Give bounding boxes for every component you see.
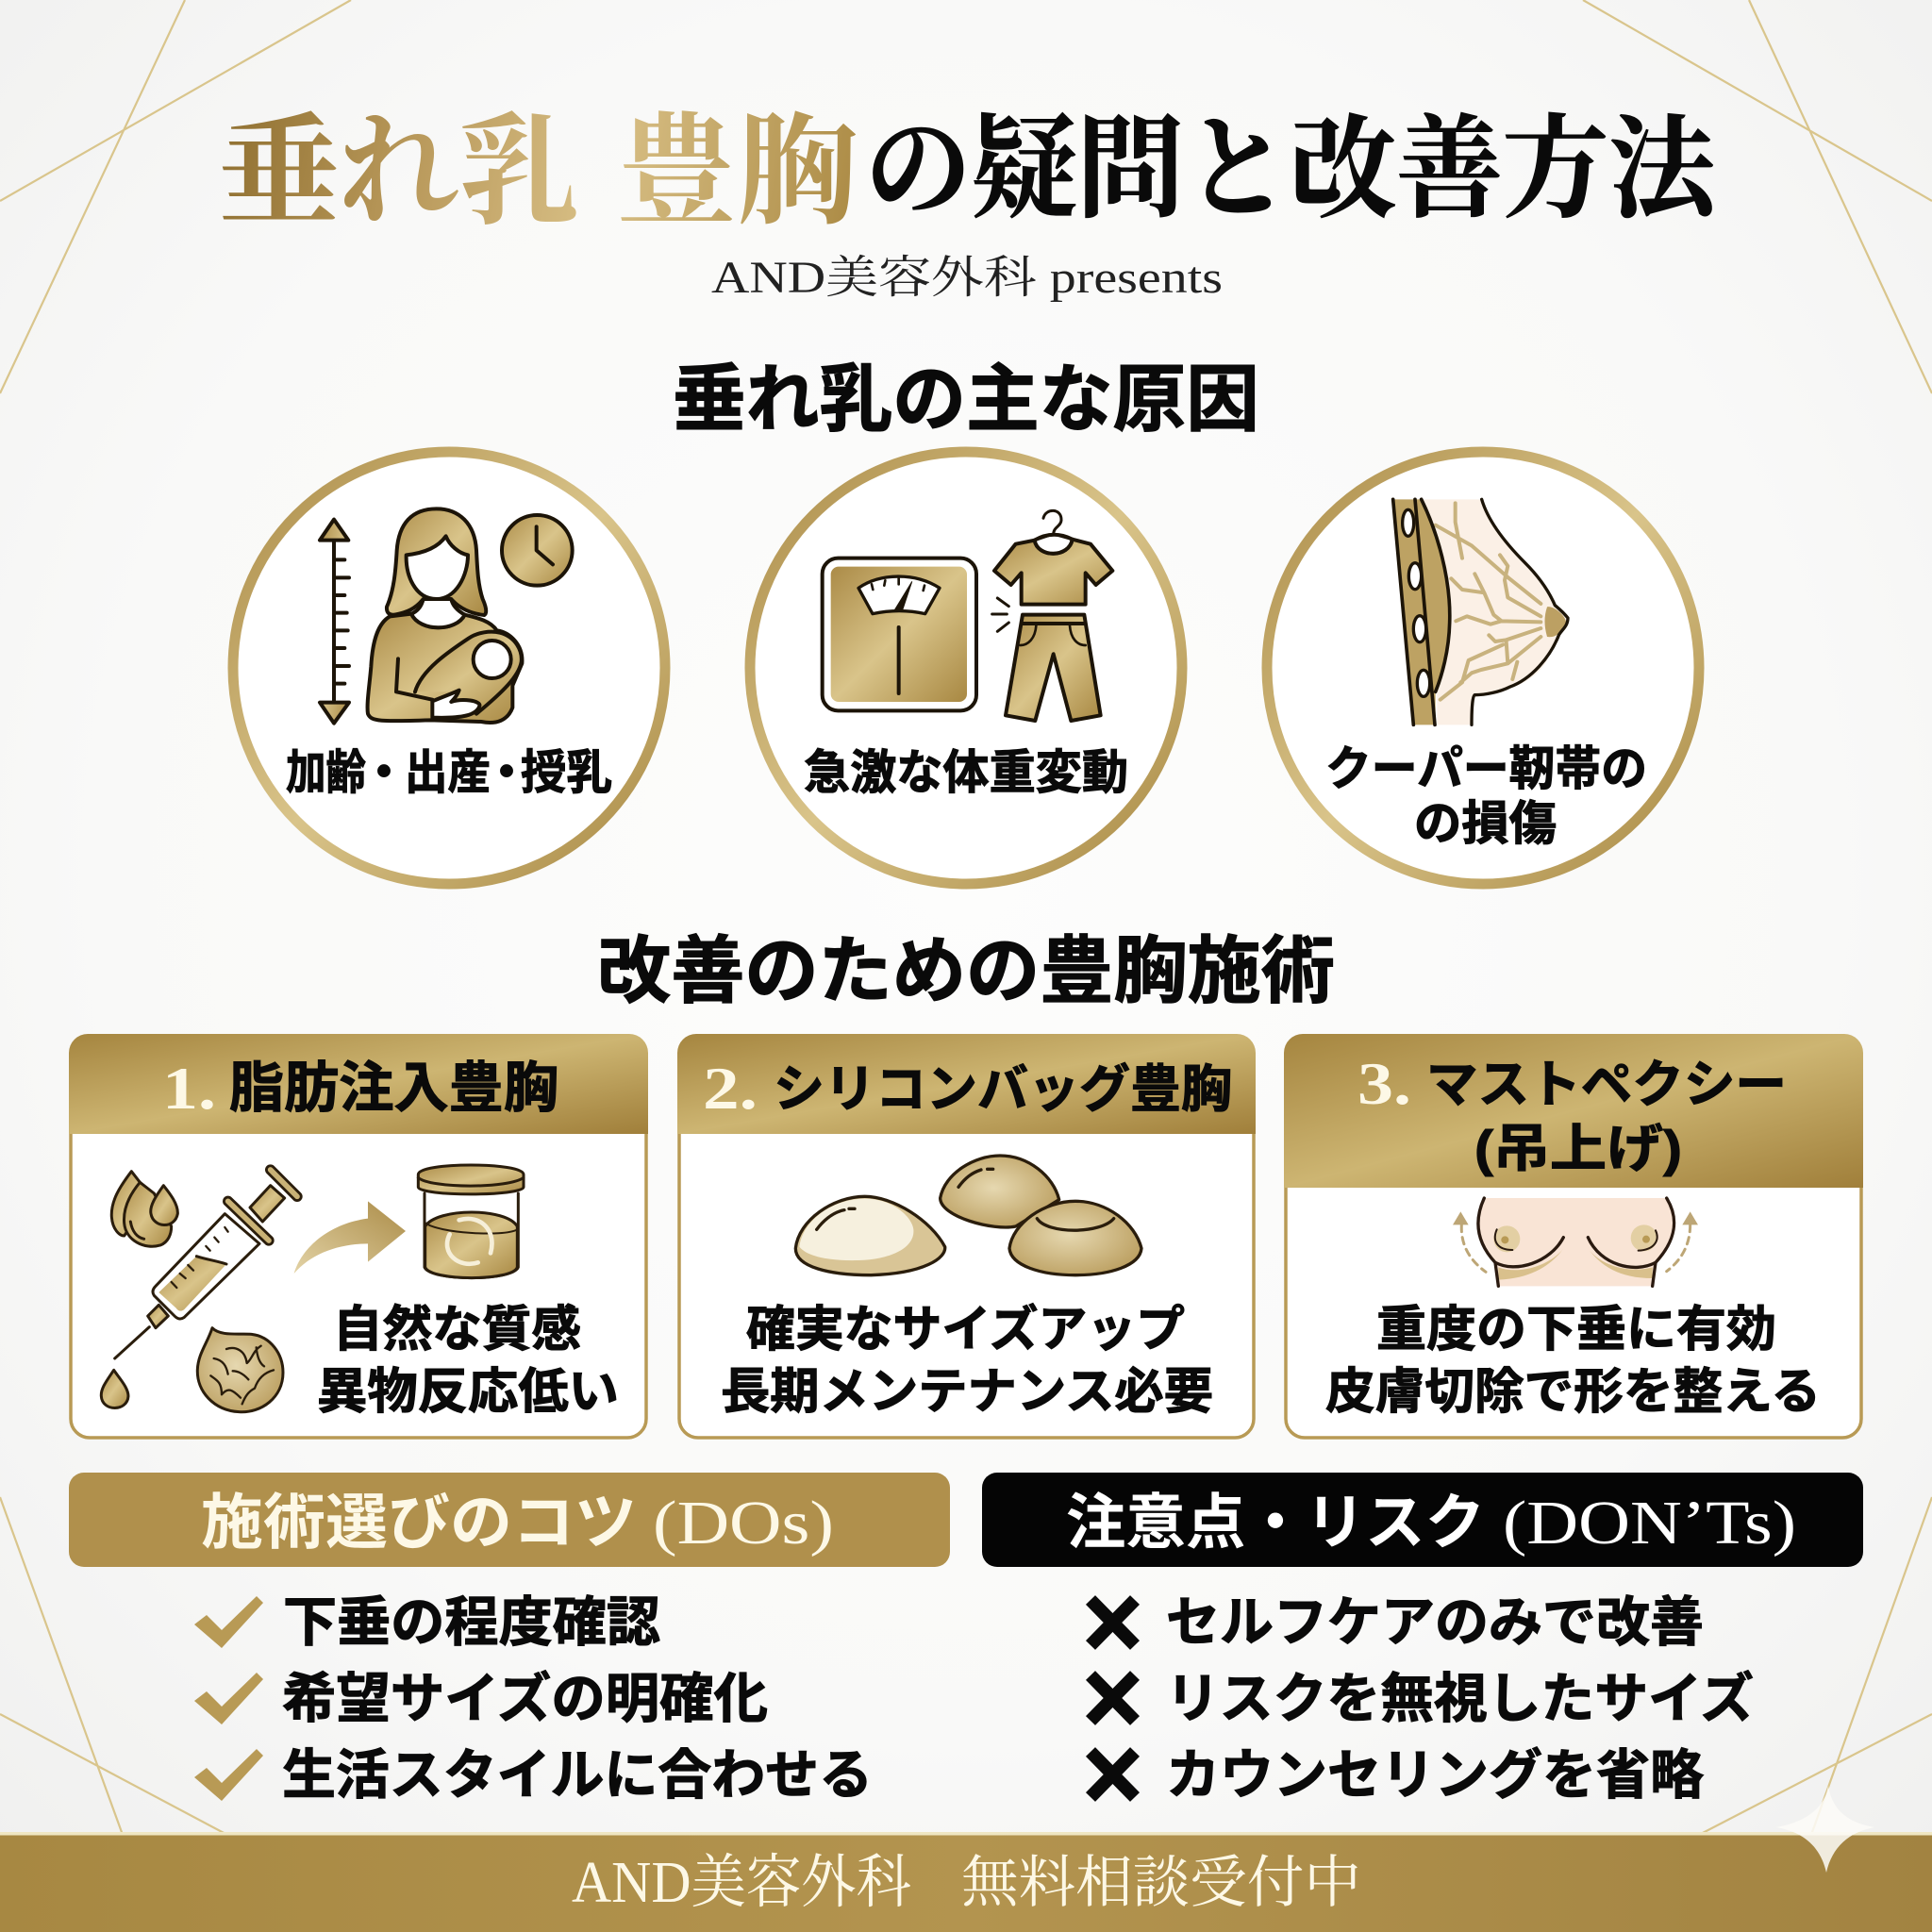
panel: DON'Ts <box>982 1473 1863 1806</box>
description: 皮膚切除で形を整える <box>1325 1365 1821 1420</box>
label: 加齢 <box>286 746 366 799</box>
label: の損傷 <box>1414 797 1557 850</box>
footer bar: AND美容外科 <box>572 1851 911 1915</box>
DOs header bar: (DOs) <box>653 1489 834 1557</box>
DON'Ts item 3: カウンセリングを省略 <box>1166 1745 1704 1806</box>
icon: sparkle <box>1776 1786 1874 1873</box>
panel: cause 3 Cooper ligament damage <box>1267 452 1699 884</box>
description: 自然な質感 <box>333 1303 581 1357</box>
description <box>1325 1303 1821 1420</box>
label: ・ <box>360 746 408 799</box>
title: 豊胸 <box>616 106 858 240</box>
heading: causes: 垂れ乳の主な原因 <box>673 358 1259 441</box>
label <box>286 746 612 799</box>
description: 長期メンテナンス必要 <box>721 1365 1213 1420</box>
DON'Ts header bar <box>982 1473 1863 1567</box>
header: (吊上げ) <box>1474 1121 1682 1177</box>
header: 1. <box>162 1055 216 1122</box>
DOs item 3: 生活スタイルに合わせる <box>282 1745 873 1806</box>
icon: scale and clothes <box>823 510 1112 721</box>
panel: cause 2 weight change <box>750 452 1182 884</box>
description <box>317 1303 619 1420</box>
DOs header bar: 施術選びのコツ <box>201 1489 637 1557</box>
description: 重度の下垂に有効 <box>1376 1303 1776 1357</box>
header <box>677 1034 1256 1134</box>
header <box>1284 1034 1863 1188</box>
title <box>219 106 1724 240</box>
footer bar: 無料相談受付中 <box>961 1852 1361 1914</box>
panel: cause 1 aging, childbirth, nursing <box>233 452 665 884</box>
description <box>721 1303 1213 1420</box>
title: の疑問と改善方法 <box>865 108 1724 232</box>
DON'Ts header bar: (DON’Ts) <box>1503 1489 1796 1557</box>
title: 垂れ乳 <box>219 106 579 240</box>
panel: treatment 1 fat injection <box>69 1034 648 1438</box>
panel: treatment 2 silicone implant <box>677 1034 1256 1438</box>
label <box>1325 742 1647 850</box>
header: シリコンバッグ豊胸 <box>774 1061 1232 1118</box>
label: ・ <box>483 746 530 799</box>
DOs item 2: 希望サイズの明確化 <box>282 1669 768 1729</box>
description: 確実なサイズアップ <box>746 1303 1185 1357</box>
label: 授乳 <box>521 746 612 799</box>
icon: torso with lift arrows <box>1453 1198 1698 1286</box>
icon: silicone implants <box>795 1156 1141 1275</box>
label: 急激な体重変動 <box>804 746 1128 799</box>
DON'Ts item 2: リスクを無視したサイズ <box>1166 1669 1754 1729</box>
icon: mother, baby, ruler and clock <box>320 508 573 724</box>
subtitle: AND美容外科 presents <box>711 253 1223 303</box>
footer bar <box>0 1832 1932 1932</box>
DOs header bar <box>69 1473 950 1567</box>
DOs item 1: 下垂の程度確認 <box>283 1592 660 1653</box>
DON'Ts item 1: セルフケアのみで改善 <box>1166 1592 1704 1653</box>
header: 脂肪注入豊胸 <box>229 1058 558 1119</box>
label: クーパー靭帯の <box>1325 742 1647 795</box>
icon: syringe, fat, jar <box>101 1165 524 1412</box>
header: 3. <box>1357 1050 1411 1117</box>
label: 出産 <box>405 746 491 799</box>
header: 2. <box>703 1055 758 1122</box>
panel: DOs <box>69 1473 950 1806</box>
header: マストペクシー <box>1426 1057 1787 1113</box>
header <box>69 1034 648 1134</box>
DON'Ts header bar: 注意点・リスク <box>1066 1489 1485 1557</box>
heading: treatments: 改善のための豊胸施術 <box>597 929 1335 1012</box>
panel: treatment 3 mastopexy <box>1284 1034 1863 1438</box>
description: 異物反応低い <box>317 1365 619 1420</box>
icon: breast anatomy cross-section <box>1393 499 1568 724</box>
